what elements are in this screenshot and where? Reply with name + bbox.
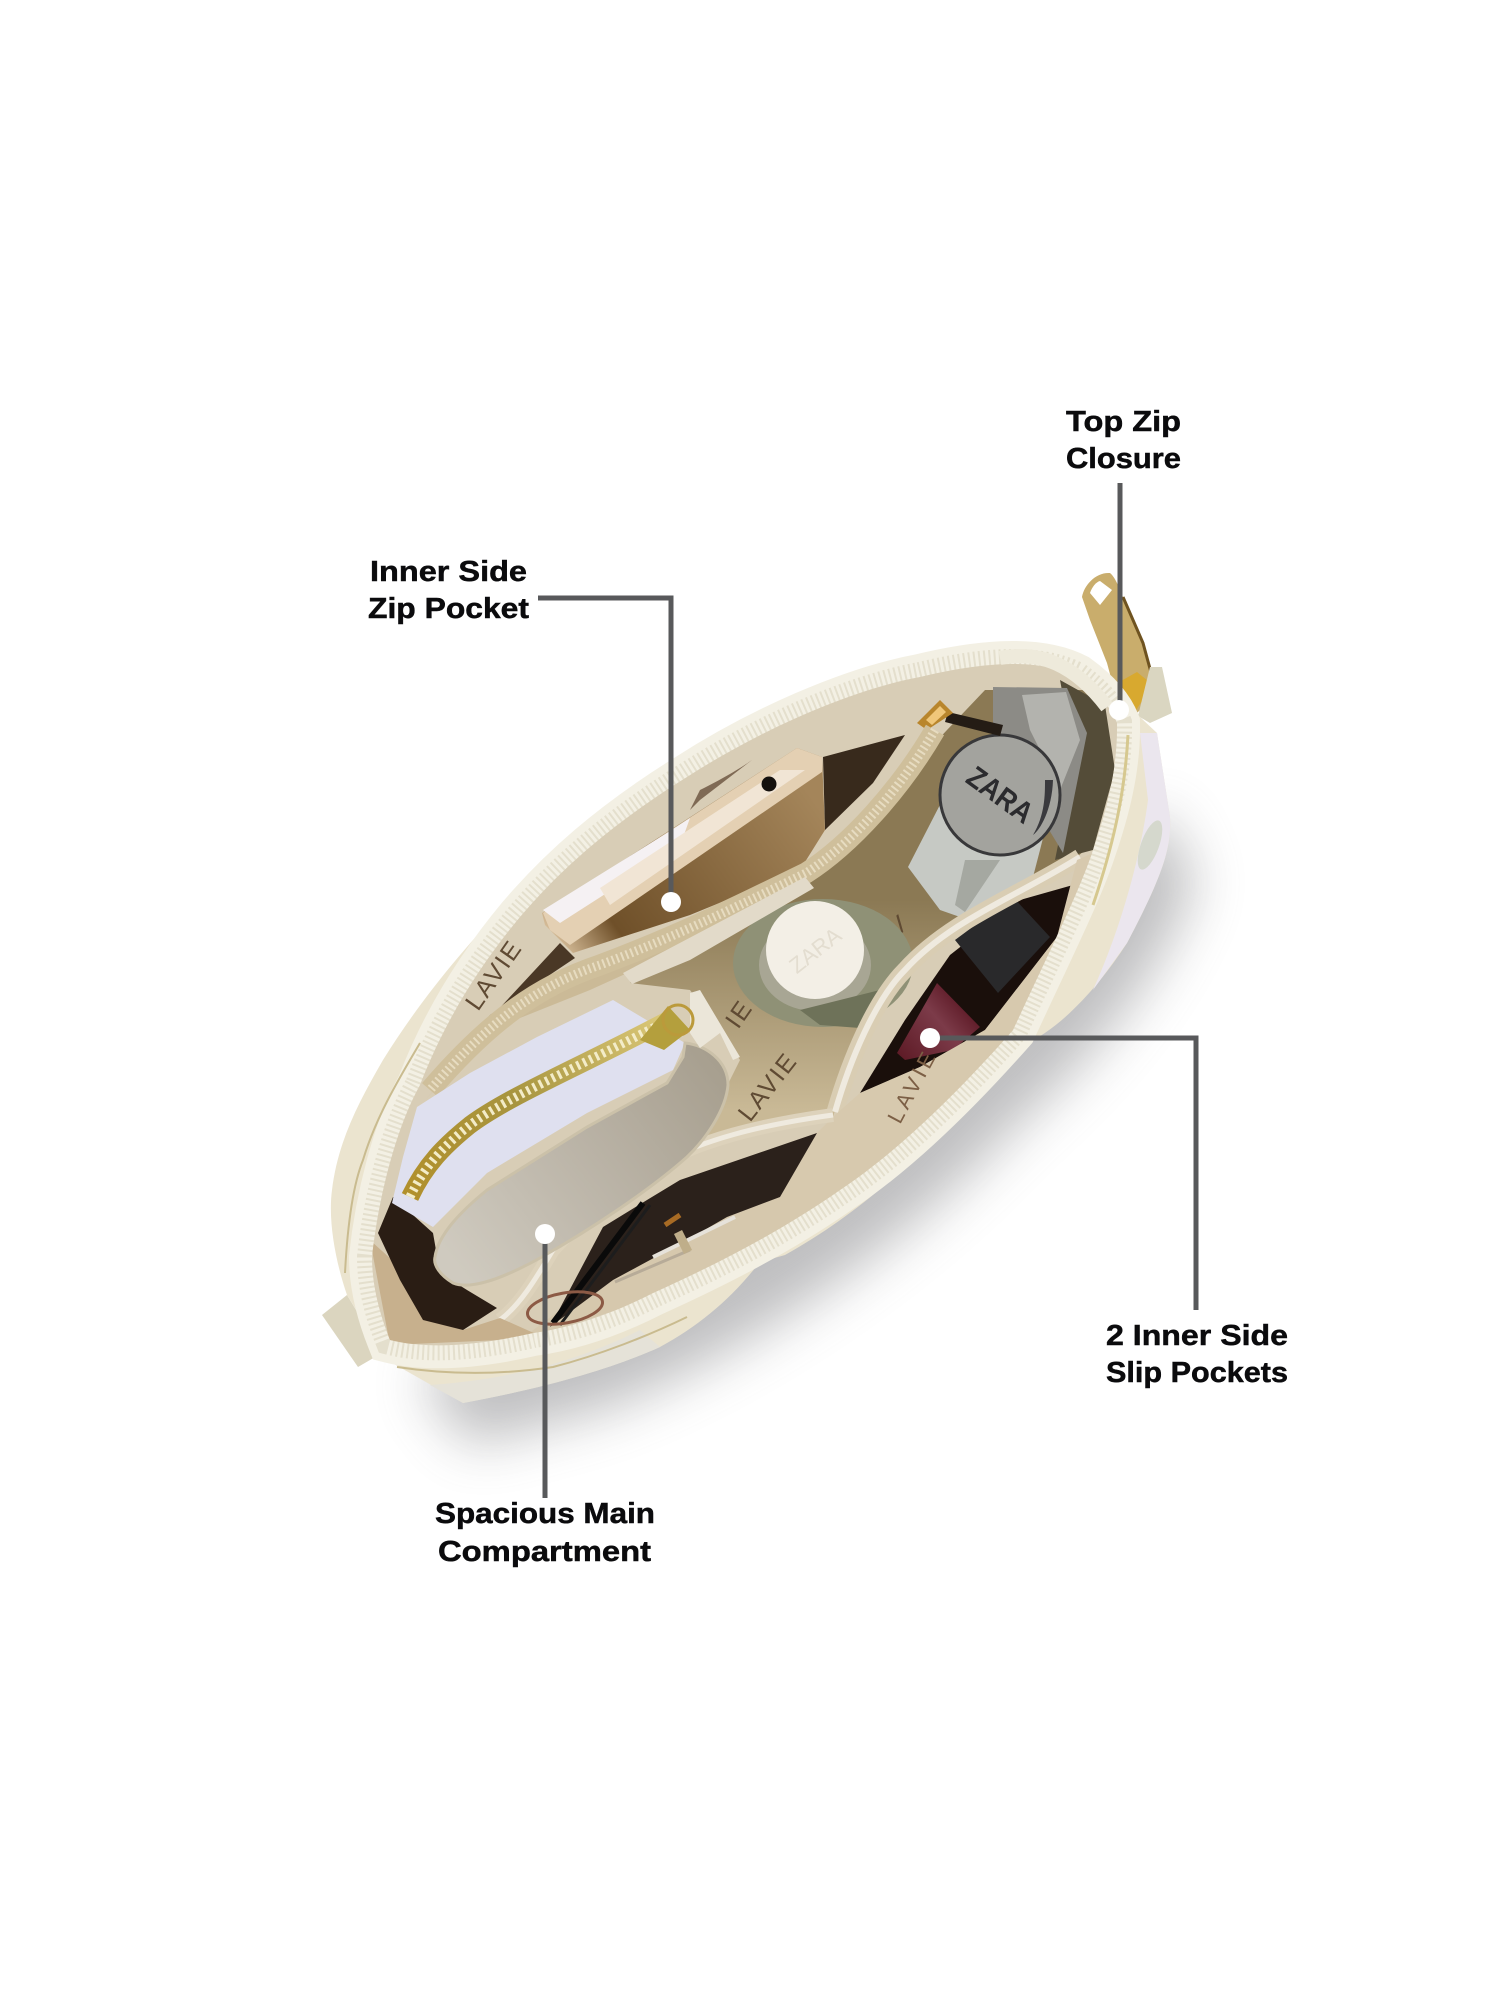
marker dot bbox=[535, 1224, 555, 1244]
left slip pocket rim bbox=[500, 1115, 833, 1320]
right slip pocket rim bbox=[835, 857, 1080, 1112]
camera bbox=[762, 776, 776, 792]
right slip pocket dark bbox=[860, 885, 1073, 1093]
large bottle: ZARA bbox=[960, 760, 1039, 831]
zipper teeth bbox=[410, 1018, 672, 1197]
cap bbox=[940, 735, 1060, 855]
phone bbox=[542, 748, 825, 953]
label: Top Zip Closure: Top Zip bbox=[1066, 406, 1181, 438]
patterned side panel bbox=[1093, 733, 1170, 990]
callout: 2 Inner Side Slip Pockets bbox=[920, 1028, 1288, 1389]
left rim highlight bbox=[500, 1115, 833, 1320]
small bottle bbox=[733, 899, 913, 1028]
zip pull bbox=[1082, 573, 1155, 717]
side panel motif bbox=[1133, 817, 1167, 873]
bag shadow bbox=[420, 810, 1195, 1445]
zipper band bbox=[345, 664, 1128, 1373]
zip ring bbox=[663, 1005, 693, 1035]
callout: Inner Side Zip Pocket bbox=[368, 556, 681, 912]
label: Spacious Main Compartment: Spacious Main bbox=[435, 1498, 655, 1530]
right rim highlight bbox=[835, 857, 1080, 1112]
zip slider bbox=[640, 1006, 690, 1050]
red lipstick bbox=[897, 983, 980, 1060]
back wall lettering: LAVIE bbox=[460, 935, 528, 1015]
bag interior bbox=[372, 664, 1117, 1346]
right end tab bbox=[1138, 667, 1172, 723]
floor lettering: LAV bbox=[856, 909, 914, 963]
left end tab bbox=[322, 1295, 382, 1367]
left dark gap bbox=[490, 943, 575, 1016]
left slip pocket dark bbox=[550, 1133, 817, 1327]
bottom lining patch bbox=[370, 1240, 545, 1345]
floor lettering: IE bbox=[720, 995, 759, 1033]
product photo: open bag interior bbox=[322, 573, 1195, 1445]
lining behind phone bbox=[690, 760, 752, 810]
callout: Top Zip Closure bbox=[1066, 406, 1181, 720]
label: Inner Side Zip Pocket: Zip Pocket bbox=[368, 593, 529, 625]
top closure bend bbox=[1000, 656, 1107, 707]
tab on pocket bbox=[623, 877, 814, 984]
black cap bbox=[955, 897, 1050, 993]
lining emblem bbox=[525, 1287, 605, 1329]
bag outer shell bbox=[331, 649, 1170, 1403]
label: 2 Inner Side Slip Pockets: 2 Inner Side bbox=[1106, 1320, 1288, 1352]
lining bbox=[372, 664, 1117, 1346]
pouch lavender top bbox=[392, 1000, 685, 1227]
leader line bbox=[1118, 483, 1122, 710]
lower lining bbox=[520, 1185, 790, 1340]
lower right lining bbox=[760, 850, 1100, 1245]
pouch strap bbox=[690, 990, 740, 1060]
coin pouch bbox=[392, 990, 740, 1285]
floor lettering: LAVIE bbox=[733, 1047, 803, 1127]
callout: Spacious Main Compartment bbox=[435, 1224, 655, 1568]
inner zip tape bbox=[430, 730, 935, 1090]
pouch body bbox=[435, 1043, 728, 1285]
leader line bbox=[930, 1038, 1196, 1310]
large bottle bbox=[908, 687, 1087, 917]
cap shadow arcs bbox=[1033, 780, 1053, 835]
label: Spacious Main Compartment: Compartment bbox=[438, 1536, 651, 1568]
label: Top Zip Closure: Closure bbox=[1066, 443, 1181, 475]
sunglasses bbox=[553, 1203, 735, 1325]
lining below tape bbox=[425, 928, 720, 1100]
floor lettering bbox=[725, 914, 904, 1122]
marker dot bbox=[1109, 700, 1129, 720]
label: 2 Inner Side Slip Pockets: Slip Pockets bbox=[1106, 1357, 1288, 1389]
phone pocket back bbox=[823, 735, 905, 830]
lower right lettering: LAVIE bbox=[882, 1044, 942, 1127]
centre floor bbox=[630, 690, 1115, 1145]
small bottle: ZARA bbox=[784, 922, 846, 978]
marker dot bbox=[661, 892, 681, 912]
bottom side panel bbox=[430, 1330, 660, 1403]
leader line bbox=[538, 598, 671, 902]
brand tag and zipper puller bbox=[917, 700, 1003, 736]
bottom left dark area bbox=[378, 1197, 497, 1330]
dark olive area beside bottle bbox=[1055, 680, 1115, 860]
label: Inner Side Zip Pocket: Inner Side bbox=[370, 556, 527, 588]
marker dot bbox=[920, 1028, 940, 1048]
leader line bbox=[542, 1234, 548, 1498]
pouch gold zipper bbox=[410, 1018, 672, 1197]
